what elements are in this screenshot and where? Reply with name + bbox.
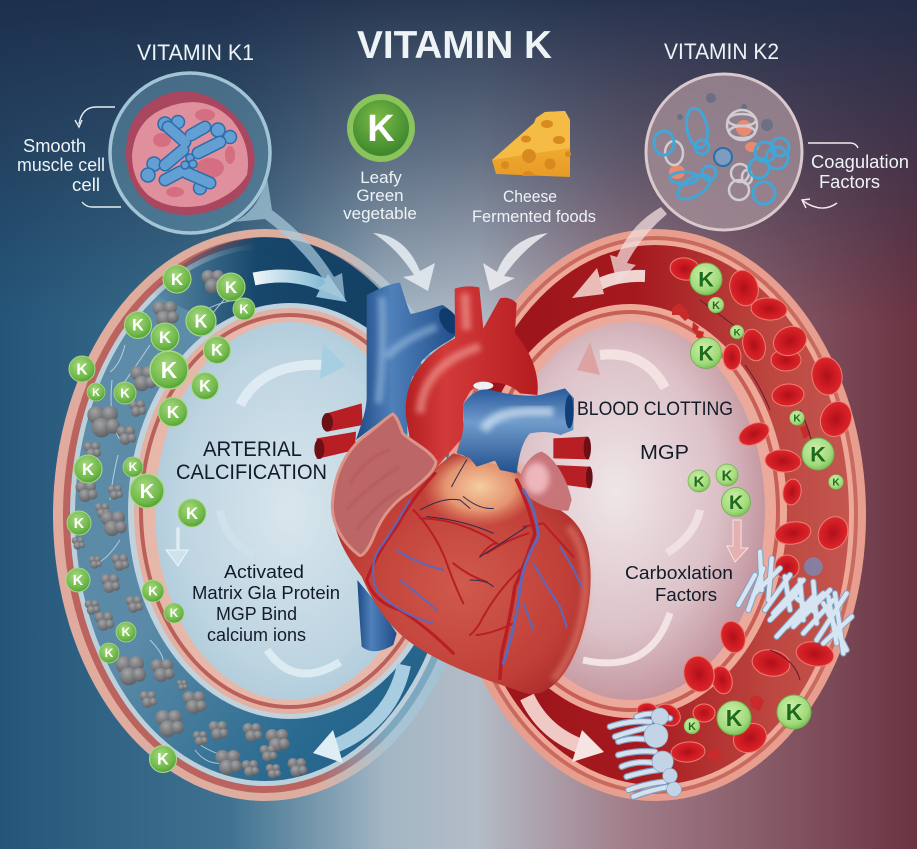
green vitamin K particles: left ring: K bbox=[76, 361, 88, 378]
aorta bbox=[406, 286, 538, 467]
green vitamin K particles: left ring: K bbox=[82, 460, 94, 479]
label: smooth muscle cell bbox=[17, 136, 105, 195]
opening under aortic arch bbox=[473, 382, 493, 390]
green vitamin K particles: right ring and MGP: K bbox=[832, 478, 840, 489]
icon: cheese bbox=[492, 111, 571, 177]
arrow: top of right band bbox=[572, 268, 645, 298]
green vitamin K particles: left ring: K bbox=[140, 481, 155, 503]
green vitamin K particles: right ring and MGP: K bbox=[810, 442, 826, 467]
green vitamin K particles: right ring and MGP: K bbox=[698, 342, 714, 365]
green vitamin K particles: right ring and MGP: K bbox=[729, 492, 743, 514]
cell outer wall bbox=[126, 91, 255, 215]
green vitamin K particles: left ring: K bbox=[157, 751, 169, 769]
callout arrows: coagulation bbox=[802, 143, 858, 208]
green vitamin K particles: right ring and MGP: K bbox=[688, 721, 696, 733]
fibres in left band bbox=[90, 295, 240, 763]
arrows inside left circle bbox=[166, 343, 346, 674]
arrow: K2 to right band bbox=[610, 207, 667, 283]
arrow: cheese to heart bbox=[483, 233, 548, 291]
callout arrows: smooth muscle bbox=[75, 107, 121, 207]
inferior vena cava bbox=[357, 580, 397, 651]
arrow: bottom of left band bbox=[313, 665, 404, 763]
text: activated matrix Gla protein: MGP Bind bbox=[216, 604, 297, 624]
green vitamin K particles: right ring and MGP: K bbox=[712, 300, 720, 312]
label: smooth muscle cell: muscle cell bbox=[17, 155, 105, 175]
label: smooth muscle cell: cell bbox=[72, 175, 100, 195]
label: cheese and fermented foods: Cheese bbox=[503, 187, 557, 206]
green vitamin K particles: left ring: K bbox=[170, 606, 179, 620]
green vitamin K particles: left ring: K bbox=[129, 460, 138, 474]
label: coagulation factors bbox=[811, 152, 909, 192]
label: cheese and fermented foods bbox=[472, 187, 596, 226]
title: VITAMIN K bbox=[357, 24, 552, 67]
crystal spine: lower clot bbox=[610, 708, 681, 797]
blue rings bbox=[654, 107, 789, 204]
heart bbox=[314, 283, 593, 694]
green vitamin K particles: left ring: K bbox=[132, 317, 144, 335]
magnifier tail: K1 bbox=[233, 177, 345, 300]
green vitamin K particles: right ring and MGP bbox=[684, 263, 844, 735]
label: leafy green vegetable: Leafy bbox=[360, 168, 402, 187]
text: activated matrix Gla protein: Activated bbox=[224, 562, 304, 582]
arrow: top of left band bbox=[254, 274, 347, 302]
heading: vitamin K1: VITAMIN K1 bbox=[137, 40, 254, 65]
cell speckles bbox=[153, 109, 235, 197]
arrow: bottom of right band bbox=[527, 697, 604, 762]
heart body bbox=[333, 453, 591, 694]
crystal rods: upper clot bbox=[738, 552, 852, 653]
green vitamin K particles: left ring: K bbox=[199, 378, 211, 396]
text: activated matrix Gla protein: calcium ions bbox=[207, 625, 306, 645]
green vitamin K particles: left ring: K bbox=[159, 328, 171, 347]
label: coagulation factors: Coagulation bbox=[811, 152, 909, 172]
green vitamin K particles: left ring: K bbox=[122, 625, 131, 639]
green vitamin K particles: left ring bbox=[66, 265, 255, 772]
green vitamin K particles: left ring: K bbox=[73, 573, 84, 589]
upper peach region bbox=[422, 447, 538, 527]
left artery ring bbox=[53, 229, 477, 801]
green vitamin K particles: left ring: K bbox=[120, 386, 130, 401]
green vitamin K particles: left ring: K bbox=[194, 311, 208, 331]
green vitamin K particles: left ring: K bbox=[171, 270, 183, 289]
green vitamin K particles: left ring: K bbox=[186, 504, 198, 523]
green vitamin K particles: right ring and MGP: K bbox=[698, 267, 714, 292]
red blood cells bbox=[637, 256, 857, 763]
pulmonary artery bbox=[457, 388, 574, 473]
superior vena cava bbox=[356, 283, 463, 443]
green vitamin K particles: left ring: K bbox=[161, 357, 178, 383]
green vitamin K particles: left ring: K bbox=[105, 646, 114, 660]
green vitamin K particles: right ring and MGP: K bbox=[726, 705, 743, 731]
green vitamin K particles: left ring: K bbox=[225, 278, 237, 297]
text: carboxylation factors: Carboxlation bbox=[625, 563, 733, 583]
right artery ring bbox=[444, 229, 866, 801]
left atrial appendage bbox=[332, 414, 436, 555]
text: blood clotting: BLOOD CLOTTING bbox=[577, 399, 733, 420]
text: activated matrix Gla protein: Matrix Gla Protein bbox=[192, 583, 340, 603]
green vitamin K particles: left ring: K bbox=[148, 584, 158, 599]
vessel stubs: right bbox=[553, 437, 593, 488]
label: cheese and fermented foods: Fermented foods bbox=[472, 207, 596, 226]
panel: K1 magnified smooth muscle cell bbox=[110, 73, 270, 233]
green vitamin K particles: right ring and MGP: K bbox=[786, 699, 803, 725]
green vitamin K particles: left ring: K bbox=[92, 387, 100, 399]
text: carboxylation factors bbox=[625, 563, 733, 605]
coronary arteries bbox=[367, 473, 573, 678]
arrow: leafy to heart bbox=[373, 233, 435, 291]
grey rings bbox=[665, 110, 757, 200]
heading: vitamin K2: VITAMIN K2 bbox=[664, 39, 779, 64]
label: leafy green vegetable bbox=[343, 168, 417, 223]
panel: K2 magnified coagulation factors bbox=[646, 74, 802, 230]
arrows inside right circle bbox=[577, 342, 748, 663]
text: activated matrix Gla protein bbox=[192, 562, 340, 645]
green vitamin K particles: right ring and MGP: K bbox=[722, 468, 733, 484]
label: leafy green vegetable: Green bbox=[356, 186, 404, 205]
text: MGP: MGP bbox=[640, 442, 689, 464]
text: carboxylation factors: Factors bbox=[655, 585, 717, 605]
green vitamin K particles: left ring: K bbox=[239, 302, 249, 317]
green vitamin K particles: right ring and MGP: K bbox=[734, 327, 741, 338]
text: arterial calcification bbox=[176, 438, 327, 484]
coronary veins bbox=[373, 460, 582, 663]
calcium deposits bbox=[72, 270, 307, 779]
orange blobs bbox=[669, 120, 759, 179]
cell inner body bbox=[132, 102, 248, 207]
text: arterial calcification: ARTERIAL bbox=[203, 438, 302, 461]
dark spots bbox=[677, 93, 773, 131]
icon: green K badge: K bbox=[367, 108, 395, 150]
vessel stubs: left bbox=[314, 403, 363, 459]
label: coagulation factors: Factors bbox=[819, 172, 880, 192]
right rim highlight bbox=[553, 527, 585, 680]
icon: green K badge bbox=[347, 94, 415, 162]
green vitamin K particles: left ring: K bbox=[167, 402, 180, 422]
right atrial appendage bbox=[519, 452, 572, 511]
green vitamin K particles: right ring and MGP: K bbox=[793, 414, 801, 425]
green vitamin K particles: right ring and MGP: K bbox=[694, 474, 705, 490]
label: smooth muscle cell: Smooth bbox=[23, 136, 86, 156]
chromosome rods bbox=[141, 116, 236, 194]
label: leafy green vegetable: vegetable bbox=[343, 204, 417, 223]
red debris and thin fibres in right band bbox=[672, 300, 815, 761]
green vitamin K particles: left ring: K bbox=[74, 516, 85, 532]
text: arterial calcification: CALCIFICATION bbox=[176, 461, 327, 484]
green vitamin K particles: left ring: K bbox=[211, 342, 223, 360]
